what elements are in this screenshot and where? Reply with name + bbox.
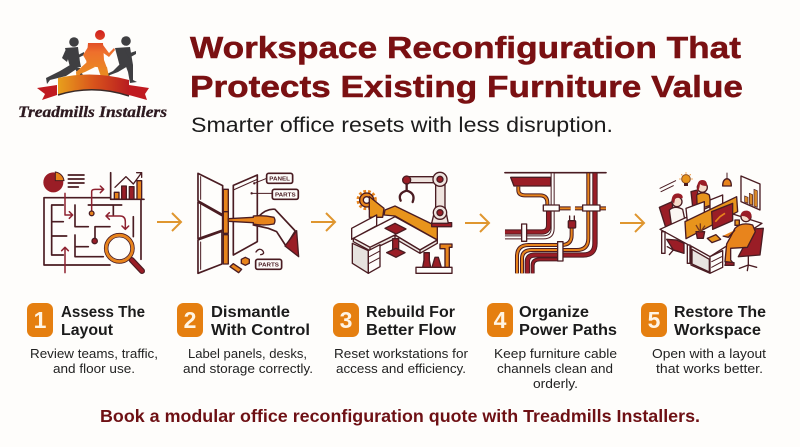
step 3 text: Reset workstations for — [334, 346, 469, 361]
arrow — [620, 214, 644, 232]
step 4 text — [494, 346, 617, 391]
step 4 heading: Organize — [519, 304, 589, 321]
icon: dismantling panels: PANEL — [269, 176, 291, 182]
step 2 text — [183, 346, 313, 376]
step 4 heading — [519, 304, 617, 339]
step 2 text: Label panels, desks, — [188, 346, 307, 361]
step 3 text: access and efficiency. — [336, 361, 466, 376]
step 1 — [27, 303, 158, 376]
arrow — [157, 213, 181, 231]
badge 3: 3 — [340, 307, 352, 333]
badge 4: 4 — [494, 307, 507, 333]
badge 2: 2 — [184, 307, 196, 333]
step 3 — [333, 303, 469, 376]
icon: dismantling panels — [198, 173, 299, 273]
step 2 heading: With Control — [211, 322, 310, 339]
logo wordmark: Treadmills Installers — [18, 104, 167, 121]
step 5 text — [652, 346, 766, 376]
icon: rebuilding workstation with robot arm — [352, 172, 452, 273]
icon: organized cable channels — [505, 173, 606, 273]
step 2 heading: Dismantle — [211, 304, 290, 321]
call to action: Book a modular office reconfiguration quote with Treadmills Installers. — [100, 406, 700, 426]
icon: dismantling panels: PARTS — [258, 262, 279, 268]
icon: floor plan assessment — [43, 172, 144, 273]
step 4 — [487, 303, 617, 391]
title — [190, 30, 743, 104]
logo: Treadmills Installers — [18, 30, 167, 121]
icon: dismantling panels: PARTS — [275, 192, 296, 198]
step 5 heading: Restore The — [674, 304, 766, 321]
step 5 — [641, 303, 766, 376]
step 3 heading: Rebuild For — [366, 304, 455, 321]
icon: restored workspace with team — [659, 172, 763, 273]
step 3 text — [334, 346, 469, 376]
step 1 text — [30, 346, 158, 376]
arrow — [311, 213, 335, 231]
step 5 heading — [674, 304, 766, 339]
step 1 text: Review teams, traffic, — [30, 346, 158, 361]
step 1 heading: Assess The — [61, 304, 145, 321]
step 2 heading — [211, 304, 310, 339]
step 5 text: that works better. — [656, 361, 763, 376]
step 4 text: channels clean and — [497, 361, 613, 376]
step 4 heading: Power Paths — [519, 322, 617, 339]
badge 1: 1 — [34, 307, 47, 333]
step 4 text: Keep furniture cable — [494, 346, 617, 361]
ribbon banner — [37, 74, 149, 100]
step 3 heading — [366, 304, 457, 339]
step 2 text: and storage correctly. — [183, 361, 313, 376]
step 4 text: orderly. — [533, 376, 578, 391]
title: Protects Existing Furniture Value — [190, 69, 743, 104]
icon: left runner — [46, 37, 85, 84]
step 1 heading — [61, 304, 145, 339]
step 5 heading: Workspace — [674, 322, 761, 339]
title: Workspace Reconfiguration That — [190, 30, 741, 65]
step 1 text: and floor use. — [53, 361, 135, 376]
icon: right runner — [103, 36, 137, 83]
step 2 — [177, 303, 313, 376]
step 1 heading: Layout — [61, 322, 114, 339]
arrow — [465, 214, 489, 232]
step 3 heading: Better Flow — [366, 322, 457, 339]
subtitle: Smarter office resets with less disruption. — [191, 114, 613, 137]
step 5 text: Open with a layout — [652, 346, 766, 361]
icon: center runner — [76, 30, 115, 85]
badge 5: 5 — [648, 307, 661, 333]
